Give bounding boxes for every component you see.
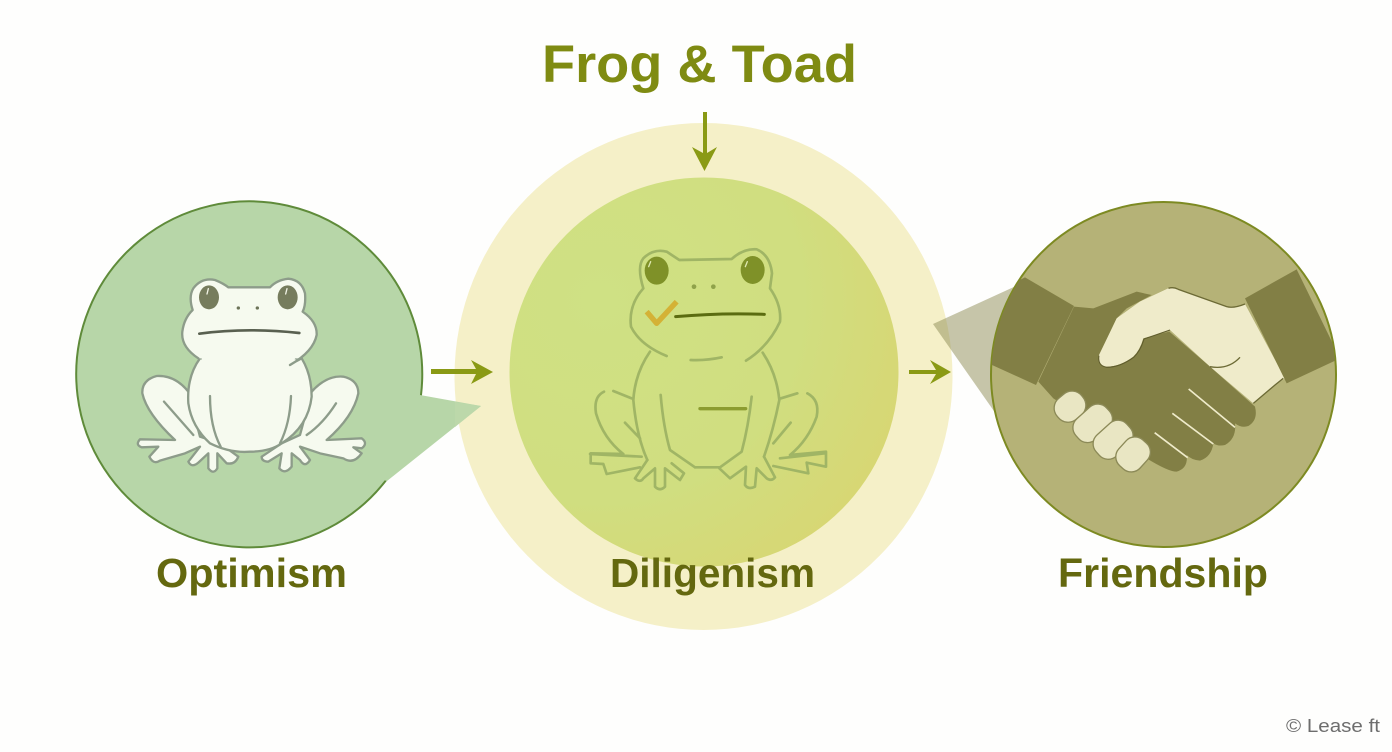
chin [691, 357, 722, 360]
dark hand [1038, 292, 1256, 472]
belly dash [700, 404, 746, 414]
mouth [676, 314, 764, 317]
mouth [199, 330, 299, 334]
panel: Optimism circle [76, 201, 481, 547]
icon: handshake [988, 269, 1340, 477]
body [188, 358, 312, 452]
head outline [631, 249, 780, 361]
title: Frog & Toad [542, 35, 857, 94]
frog arm lines [164, 396, 336, 447]
light hand [1099, 288, 1285, 403]
eyes [645, 257, 669, 285]
arrow: optimism to centre [431, 360, 493, 384]
nostrils [237, 306, 240, 310]
palm crease [1210, 357, 1240, 367]
right leg [262, 377, 365, 471]
left cuff [988, 277, 1074, 385]
panel: Friendship circle [933, 202, 1340, 547]
credit: © Lease ft [1286, 716, 1380, 736]
label: Diligenism: Diligenism [610, 550, 815, 596]
label: Optimism: Optimism [156, 550, 347, 596]
left foot [635, 460, 684, 489]
label: Friendship: Friendship [1058, 550, 1268, 596]
panel: Diligenism inner circle [510, 178, 898, 566]
belly lines [661, 395, 752, 467]
callout wedge [933, 286, 1016, 414]
right foot [719, 457, 775, 488]
icon: outline frog [590, 249, 826, 489]
head [182, 279, 317, 365]
arrow: title to centre [692, 112, 717, 171]
fingers [1054, 390, 1151, 473]
outer halo: Diligenism [454, 123, 952, 630]
nostrils [692, 284, 696, 289]
right cuff [1245, 269, 1340, 383]
body outline [633, 352, 779, 460]
icon: light frog [138, 279, 365, 472]
eye glints [649, 262, 747, 267]
eyes [199, 285, 219, 309]
arrow: centre to friendship [909, 360, 951, 384]
thumb edge [1099, 330, 1170, 367]
left leg [590, 391, 642, 474]
right leg [773, 393, 826, 473]
left leg [138, 376, 238, 472]
thumb [1099, 288, 1175, 367]
finger creases [1155, 389, 1235, 458]
check mark [647, 302, 677, 323]
eye glints [207, 289, 287, 294]
light hand edge [1168, 288, 1283, 403]
neck fill [202, 348, 295, 368]
